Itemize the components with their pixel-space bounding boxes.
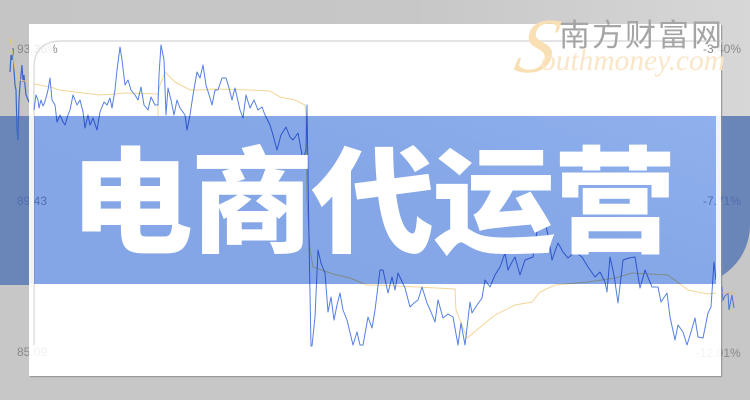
watermark: southmoney logo: 南方财富网 bbox=[559, 10, 724, 55]
axis labels top and bottom: -3.40% bbox=[703, 42, 741, 56]
background band bbox=[0, 116, 750, 285]
axis labels top and bottom: 93.36% bbox=[17, 42, 58, 56]
axis labels top and bottom: 85.09 bbox=[17, 345, 47, 359]
moving average line bbox=[34, 72, 716, 338]
axis labels top and bottom bbox=[17, 42, 741, 360]
outer chart line right bbox=[721, 285, 734, 310]
outer chart line left bbox=[10, 48, 29, 140]
watermark: southmoney logo: S bbox=[508, 3, 568, 90]
chart frame bbox=[34, 41, 722, 345]
inner blue band bbox=[34, 116, 716, 284]
label fade masks bbox=[29, 40, 721, 361]
watermark: southmoney logo bbox=[508, 3, 725, 90]
axis labels middle: -7.71% bbox=[703, 194, 741, 208]
outer moving average right bbox=[721, 292, 735, 294]
panel edge strips bbox=[29, 116, 721, 284]
axis labels top and bottom: -12.01% bbox=[696, 346, 741, 360]
axis labels middle bbox=[17, 194, 741, 208]
watermark: southmoney logo: outhmoney.com bbox=[541, 44, 725, 77]
outer moving average left bbox=[10, 38, 29, 82]
axis labels middle: 89.43 bbox=[17, 194, 47, 208]
price line bbox=[34, 45, 716, 346]
title: 电商代运营 bbox=[70, 111, 674, 277]
